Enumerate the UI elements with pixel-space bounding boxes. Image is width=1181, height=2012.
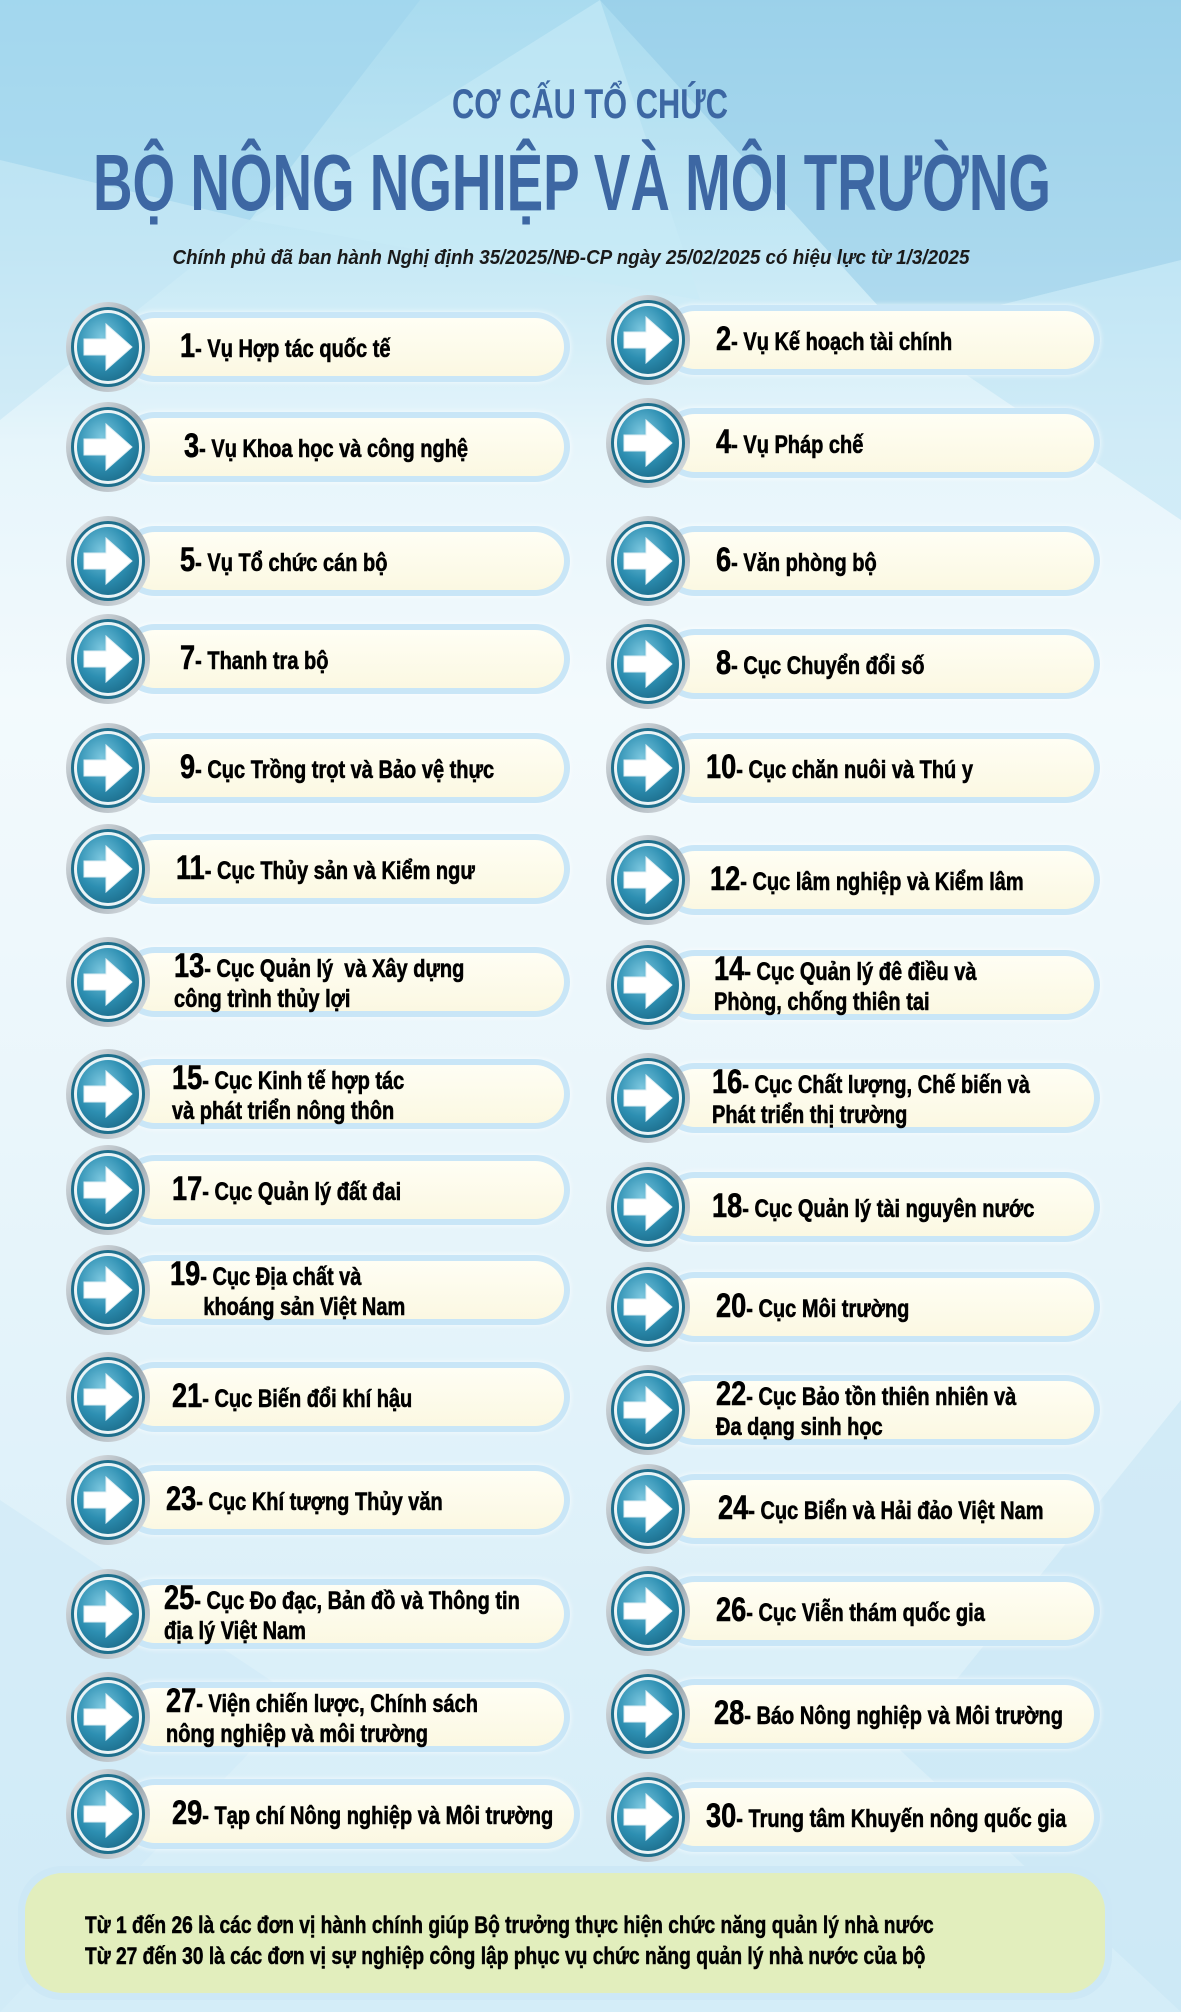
item 3: [66, 402, 570, 492]
item 21: 21- Cục Biến đổi khí hậu: [172, 1376, 412, 1414]
item 14: [606, 940, 1100, 1030]
item 13: công trình thủy lợi: [174, 984, 350, 1012]
footer text: Từ 1 đến 26 là các đơn vị hành chính giúp Bộ trưởng thực hiện chức năng quản lý nhà nước: [85, 1912, 934, 1939]
item 12: [606, 835, 1100, 925]
item 10: [606, 723, 1100, 813]
item 16: 16- Cục Chất lượng, Chế biến và: [712, 1062, 1030, 1100]
item 26: [606, 1566, 1102, 1656]
item 23: 23- Cục Khí tượng Thủy văn: [166, 1480, 443, 1518]
item 25: địa lý Việt Nam: [164, 1616, 306, 1644]
item 3: 3- Vụ Khoa học và công nghệ: [184, 426, 468, 464]
item 25: [66, 1569, 572, 1659]
item 24: 24- Cục Biển và Hải đảo Việt Nam: [718, 1488, 1044, 1526]
item 12: 12- Cục lâm nghiệp và Kiểm lâm: [710, 860, 1024, 898]
item 26: 26- Cục Viễn thám quốc gia: [716, 1590, 985, 1628]
subtitle: Chính phủ đã ban hành Nghị định 35/2025/NĐ-CP ngày 25/02/2025 có hiệu lực từ 1/3/2025: [172, 247, 970, 269]
item 27: nông nghiệp và môi trường: [166, 1720, 428, 1748]
item 11: 11- Cục Thủy sản và Kiểm ngư: [176, 848, 475, 886]
item 8: 8- Cục Chuyển đổi số: [716, 644, 924, 682]
item 30: [606, 1772, 1102, 1862]
item 5: 5- Vụ Tổ chức cán bộ: [180, 540, 387, 578]
item 13: 13- Cục Quản lý và Xây dựng: [174, 946, 464, 984]
item 15: và phát triển nông thôn: [172, 1096, 394, 1124]
item 15: 15- Cục Kinh tế hợp tác: [172, 1058, 404, 1096]
item 9: [66, 723, 570, 813]
item 29: 29- Tạp chí Nông nghiệp và Môi trường: [172, 1794, 553, 1832]
item 17: [66, 1145, 570, 1235]
item 28: 28- Báo Nông nghiệp và Môi trường: [714, 1694, 1063, 1732]
item 11: [66, 824, 570, 914]
item 13: [66, 937, 570, 1027]
item 16: Phát triển thị trường: [712, 1100, 907, 1128]
footer text: Từ 27 đến 30 là các đơn vị sự nghiệp công lập phục vụ chức năng quản lý nhà nước của bộ: [85, 1943, 925, 1970]
item 28: [606, 1669, 1102, 1759]
item 14: 14- Cục Quản lý đê điều và: [714, 950, 977, 988]
title: small: CƠ CẤU TỔ CHỨC: [452, 78, 728, 127]
item 23: [66, 1455, 571, 1545]
item 19: 19- Cục Địa chất và: [170, 1254, 361, 1292]
item 5: [66, 516, 570, 606]
footer note box: [18, 1866, 1112, 2000]
item 20: [606, 1262, 1100, 1352]
item 14: Phòng, chống thiên tai: [714, 988, 930, 1016]
item 25: 25- Cục Đo đạc, Bản đồ và Thông tin: [164, 1578, 520, 1616]
footer text: [85, 1912, 934, 1970]
item 6: 6- Văn phòng bộ: [716, 540, 877, 578]
item 22: Đa dạng sinh học: [716, 1412, 883, 1440]
item 29: [66, 1769, 582, 1859]
item 2: 2- Vụ Kế hoạch tài chính: [716, 320, 952, 358]
item 30: 30- Trung tâm Khuyến nông quốc gia: [706, 1796, 1066, 1834]
item 22: [606, 1365, 1101, 1455]
item 1: 1- Vụ Hợp tác quốc tế: [180, 326, 390, 364]
item 7: [66, 614, 570, 704]
item 18: 18- Cục Quản lý tài nguyên nước: [712, 1186, 1034, 1224]
item 19: [66, 1245, 570, 1335]
item 27: [66, 1672, 572, 1762]
item 16: [606, 1053, 1100, 1143]
item 24: [606, 1464, 1102, 1554]
item 4: 4- Vụ Pháp chế: [716, 422, 863, 460]
item 15: [66, 1049, 570, 1139]
item 10: 10- Cục chăn nuôi và Thú y: [706, 748, 973, 786]
item 6: [606, 516, 1100, 606]
item 9: 9- Cục Trồng trọt và Bảo vệ thực: [180, 748, 494, 786]
item 20: 20- Cục Môi trường: [716, 1286, 909, 1324]
item 8: [606, 619, 1100, 709]
item 27: 27- Viện chiến lược, Chính sách: [166, 1682, 478, 1720]
item 18: [606, 1162, 1100, 1252]
item 21: [66, 1352, 571, 1442]
item 4: [606, 398, 1102, 488]
item 2: [606, 295, 1102, 385]
item 19: khoáng sản Việt Nam: [203, 1292, 405, 1320]
item 1: [66, 302, 572, 392]
item 22: 22- Cục Bảo tồn thiên nhiên và: [716, 1374, 1016, 1412]
item 7: 7- Thanh tra bộ: [180, 638, 328, 676]
item 17: 17- Cục Quản lý đất đai: [172, 1170, 401, 1208]
